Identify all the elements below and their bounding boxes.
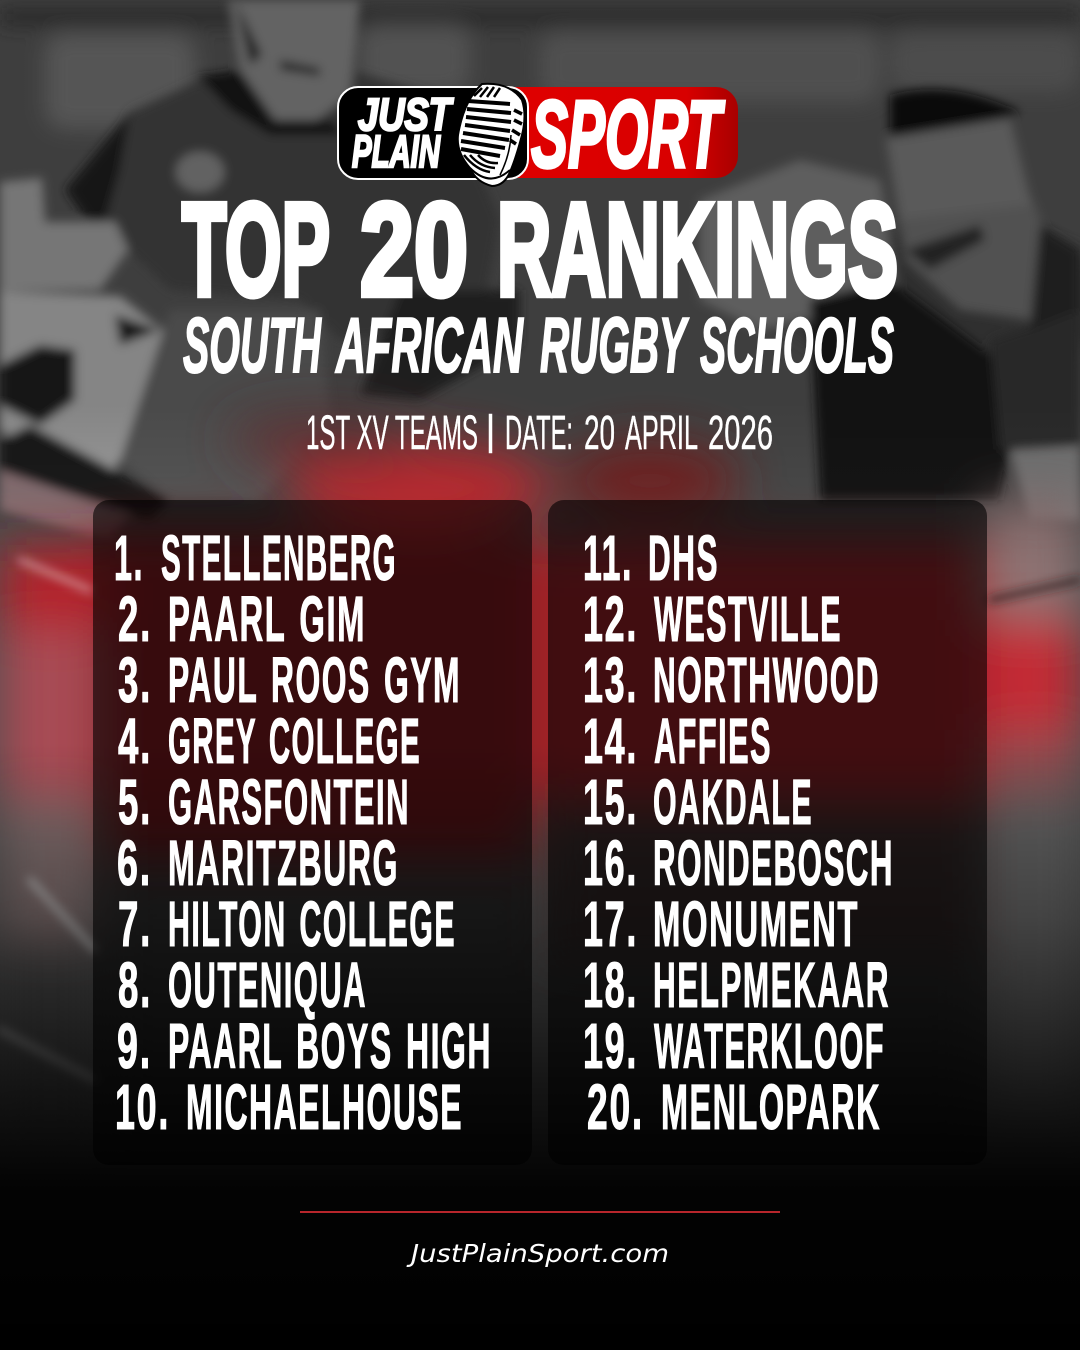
rank 19 (583, 1010, 885, 1082)
subtitle: SOUTH (183, 301, 322, 389)
logo word: PLAIN: PLAIN (352, 126, 441, 177)
rank 1: 1. (114, 522, 144, 594)
rank 12: 12. (583, 583, 638, 655)
rank 9 (117, 1010, 492, 1082)
rank 6 (117, 827, 399, 899)
rank 15 (583, 766, 813, 838)
subtitle: AFRICAN (335, 301, 524, 389)
panel: rankings 11 to 20 (548, 500, 987, 1165)
rank 8 (118, 949, 367, 1021)
panel background left (93, 500, 532, 1165)
rank 10 (115, 1071, 463, 1143)
rank 7: 7. (118, 888, 152, 960)
panel background right (548, 500, 987, 1165)
date line: DATE: (505, 407, 573, 460)
title: TOP (182, 176, 330, 323)
rank 5 (118, 766, 410, 838)
panel: rankings 1 to 10: OUTENIQUA (168, 949, 367, 1021)
rank 14: 14. (583, 705, 638, 777)
date line: APRIL (625, 407, 698, 460)
title (182, 176, 898, 323)
subtitle (183, 301, 894, 389)
rank 9: 9. (117, 1010, 152, 1082)
rank 17: 17. (583, 888, 638, 960)
rank 7 (118, 888, 456, 960)
rank 12 (583, 583, 842, 655)
rank 20 (587, 1071, 881, 1143)
rank 16: 16. (583, 827, 638, 899)
rank 14 (583, 705, 772, 777)
subtitle: SCHOOLS (700, 301, 894, 389)
rank 13: 13. (583, 644, 638, 716)
rank 2 (118, 583, 366, 655)
rank 4 (118, 705, 421, 777)
rank 11 (583, 522, 719, 594)
logo: Just Plain Sport (338, 81, 738, 188)
rank 13 (583, 644, 880, 716)
rank 1 (114, 522, 397, 594)
rank 19: 19. (583, 1010, 638, 1082)
rank 11: 11. (583, 522, 633, 594)
date line: 1ST XV TEAMS (306, 407, 478, 460)
rank 6: MARITZBURG (168, 827, 399, 899)
rank 17 (583, 888, 859, 960)
rank 18: 18. (583, 949, 638, 1021)
rank 2: PAARL GIM (168, 583, 366, 655)
panel: rankings 1 to 10: GARSFONTEIN (168, 766, 410, 838)
rank 2: 2. (118, 583, 152, 655)
rank 18 (583, 949, 890, 1021)
logo black plate (338, 87, 528, 179)
rank 6: 6. (117, 827, 152, 899)
panel: rankings 11 to 20: WESTVILLE (654, 583, 842, 655)
rank 3 (118, 644, 461, 716)
title: 20 (360, 176, 468, 323)
rank 5: 5. (118, 766, 152, 838)
panel: rankings 1 to 10: HILTON COLLEGE (168, 888, 456, 960)
panel: rankings 11 to 20: AFFIES (654, 705, 772, 777)
logo red plate (480, 87, 738, 178)
panel: rankings 11 to 20: DHS (648, 522, 719, 594)
footer website: JustPlainSport.com (406, 1239, 669, 1268)
logo word: JUST: JUST (358, 89, 454, 140)
rank 3: 3. (118, 644, 152, 716)
panel: rankings 1 to 10: PAARL BOYS HIGH (168, 1010, 492, 1082)
subtitle: RUGBY (540, 301, 689, 389)
rank 15: 15. (583, 766, 638, 838)
panel: rankings 1 to 10: MICHAELHOUSE (186, 1071, 463, 1143)
icon: microphone (458, 84, 524, 186)
date line: 2026 (708, 407, 773, 460)
logo word: SPORT: SPORT (531, 81, 725, 188)
panel: rankings 1 to 10: STELLENBERG (161, 522, 397, 594)
rank 4: 4. (118, 705, 152, 777)
rank 17: MONUMENT (653, 888, 859, 960)
panel: rankings 11 to 20: OAKDALE (653, 766, 813, 838)
date line: 20 (584, 407, 615, 460)
panel: rankings 1 to 10: PAUL ROOS GYM (168, 644, 461, 716)
rank 8: 8. (118, 949, 152, 1021)
rank 20: 20. (587, 1071, 644, 1143)
panel: rankings 1 to 10: GREY COLLEGE (168, 705, 421, 777)
rank 10: 10. (115, 1071, 170, 1143)
panel: rankings 1 to 10 (93, 500, 532, 1165)
rank 16 (583, 827, 894, 899)
